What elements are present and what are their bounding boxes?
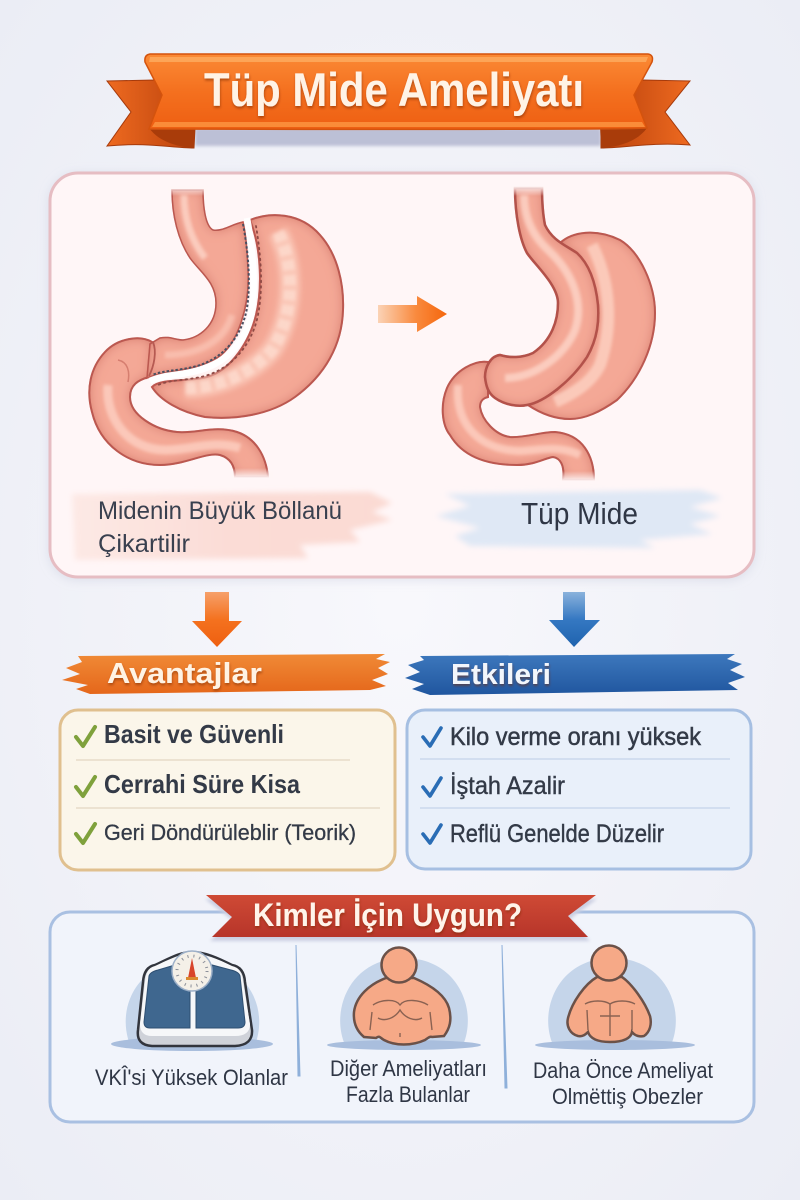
heading banner xyxy=(205,895,597,941)
heading: effects xyxy=(405,654,745,695)
label: after xyxy=(436,490,722,548)
item 1: Basit ve Güvenli xyxy=(104,719,284,749)
lower duodenum xyxy=(443,362,594,480)
icon: check xyxy=(76,824,95,843)
label: before: Midenin Büyük Böllanü xyxy=(98,497,342,525)
stomach remnant removed xyxy=(152,215,343,418)
item 3: Reflü Genelde Düzelir xyxy=(450,820,664,848)
panel: advantages list xyxy=(60,710,395,870)
icon: obese torso one xyxy=(327,948,481,1050)
icon: check xyxy=(76,777,95,796)
title text: Tüp Mide Ameliyatı xyxy=(204,63,584,116)
stomach after surgery xyxy=(443,186,655,481)
item 3: Geri Döndürüleblir (Teorik) xyxy=(104,820,356,845)
heading: effects: Etkileri xyxy=(451,659,551,691)
item 2: İştah Azalir xyxy=(450,771,565,800)
label: other surgeries too much xyxy=(330,1056,487,1107)
icon: check xyxy=(423,825,441,843)
ribbon main band xyxy=(145,54,652,129)
label: other surgeries too much: Fazla Bulanlar xyxy=(346,1082,470,1107)
title banner xyxy=(107,54,690,148)
fade at tube ends xyxy=(168,186,208,196)
heading: advantages: Avantajlar xyxy=(107,658,262,690)
stitch line remnant xyxy=(156,226,261,386)
label: before: Çikartilir xyxy=(98,530,190,558)
heading banner: Kimler İçin Uygun? xyxy=(253,897,522,933)
icon: scale xyxy=(111,951,273,1051)
stomach before surgery xyxy=(89,186,343,478)
arrow: down blue xyxy=(549,592,600,647)
back stomach xyxy=(528,233,655,419)
label: before xyxy=(72,492,392,560)
icon: obese torso two xyxy=(535,946,695,1050)
fade at tube ends xyxy=(511,186,547,196)
right ribbon tail xyxy=(601,80,690,148)
label: not previously operated xyxy=(533,1058,713,1109)
cut line gap xyxy=(150,218,254,381)
heading: advantages xyxy=(62,654,390,694)
label: high BMI: VKÎ'si Yüksek Olanlar xyxy=(95,1065,288,1090)
item 2: Cerrahi Süre Kisa xyxy=(104,769,300,799)
icon: check xyxy=(423,778,441,796)
left ribbon tail xyxy=(107,80,195,148)
arrow: before to after xyxy=(378,296,447,332)
scale dial xyxy=(172,951,212,991)
panel: who is it for xyxy=(50,895,754,1122)
gastric sleeve portion xyxy=(147,190,248,378)
label: not previously operated: Daha Önce Ameliyat xyxy=(533,1058,713,1083)
label: after: Tüp Mide xyxy=(521,496,638,531)
panel: surgery diagram xyxy=(50,173,754,577)
label: not previously operated: Olmëttiş Obezler xyxy=(552,1084,703,1109)
label: other surgeries too much: Diğer Ameliyatları xyxy=(330,1056,487,1081)
stitch line sleeve xyxy=(152,224,249,375)
duodenum xyxy=(89,338,268,477)
item 1: Kilo verme oranı yüksek xyxy=(450,723,701,751)
pink brush stroke xyxy=(72,492,392,560)
panel: effects list xyxy=(407,710,751,869)
arrow: down orange xyxy=(192,592,242,647)
tubular sleeve xyxy=(485,188,598,406)
icon: check xyxy=(423,728,441,746)
icon: check xyxy=(76,727,95,746)
blue brush stroke xyxy=(436,490,722,548)
pylorus fold xyxy=(149,342,155,376)
